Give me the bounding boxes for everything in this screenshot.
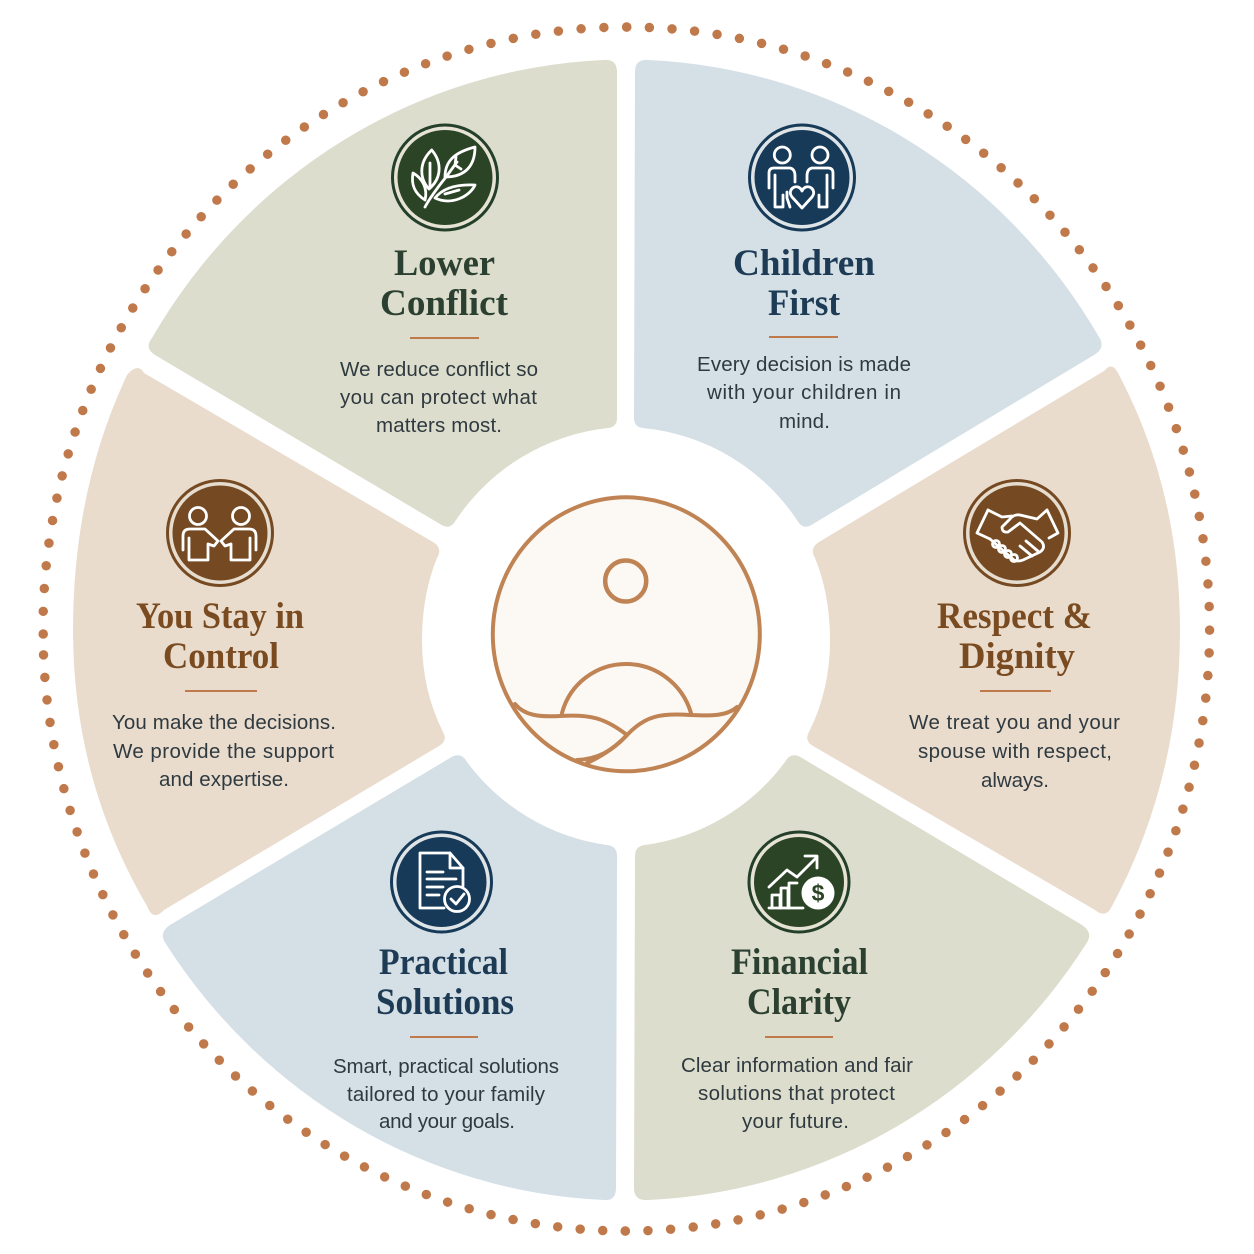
body text: We provide the support	[113, 740, 334, 763]
heading: Clarity	[747, 982, 851, 1023]
heading: Lower	[394, 243, 495, 284]
icon: leaves	[392, 125, 498, 230]
body text: solutions that protect	[698, 1082, 895, 1105]
icon: two people holding hands	[168, 480, 272, 586]
heading: Conflict	[380, 283, 509, 324]
divider	[980, 690, 1051, 692]
segment shape	[149, 60, 617, 527]
heading: Respect &	[937, 596, 1092, 637]
body text	[340, 358, 538, 437]
body text: Every decision is made	[697, 353, 911, 376]
body text: We reduce conflict so	[340, 358, 538, 381]
divider	[185, 690, 257, 692]
body text: mind.	[779, 410, 830, 433]
body text	[697, 353, 911, 433]
body text: You make the decisions.	[112, 711, 336, 734]
panel: respect and dignity	[807, 366, 1180, 914]
heading	[380, 243, 509, 324]
body text: your future.	[742, 1110, 849, 1133]
heading: You Stay in	[136, 596, 304, 637]
heading	[136, 596, 304, 677]
heading	[731, 942, 868, 1023]
divider	[769, 336, 838, 338]
heading: First	[768, 283, 841, 324]
panel: practical solutions	[163, 755, 617, 1200]
heading: Control	[163, 636, 279, 677]
body text: spouse with respect,	[918, 740, 1112, 763]
panel: you stay in control	[73, 368, 445, 915]
segment shape	[73, 368, 445, 915]
body text: and your goals.	[379, 1110, 515, 1133]
divider	[410, 337, 479, 339]
panel: lower conflict	[149, 60, 617, 527]
body text: matters most.	[376, 414, 502, 437]
heading	[376, 942, 514, 1023]
divider	[765, 1036, 833, 1038]
heading: Financial	[731, 942, 868, 983]
heading	[733, 243, 875, 324]
body text	[681, 1054, 913, 1133]
body text: and expertise.	[159, 768, 289, 791]
icon: family with heart	[750, 125, 854, 230]
segment shape	[634, 755, 1089, 1200]
heading: Solutions	[376, 982, 514, 1023]
icon: document with check	[392, 832, 492, 932]
segment shape	[634, 60, 1102, 527]
body text	[112, 711, 336, 791]
body text: Clear information and fair	[681, 1054, 913, 1077]
body text: Smart, practical solutions	[333, 1055, 559, 1078]
segment shape	[807, 366, 1180, 914]
heading: Practical	[379, 942, 508, 983]
icon: handshake	[964, 480, 1070, 586]
heading: Dignity	[959, 636, 1075, 677]
panel: children first	[634, 60, 1102, 527]
icon: growth chart with dollar: $	[812, 880, 825, 906]
body text: you can protect what	[340, 386, 537, 409]
body text	[909, 711, 1120, 792]
heading: Children	[733, 243, 875, 284]
body text: always.	[981, 769, 1049, 792]
icon: growth chart with dollar	[749, 832, 849, 932]
body text: with your children in	[706, 381, 901, 404]
heading	[937, 596, 1092, 677]
body text	[333, 1055, 559, 1133]
divider	[410, 1036, 478, 1038]
body text: We treat you and your	[909, 711, 1120, 734]
body text: tailored to your family	[347, 1083, 546, 1106]
segment shape	[163, 755, 617, 1200]
center emblem: sun and hills	[493, 497, 760, 771]
panel: financial clarity	[634, 755, 1089, 1200]
